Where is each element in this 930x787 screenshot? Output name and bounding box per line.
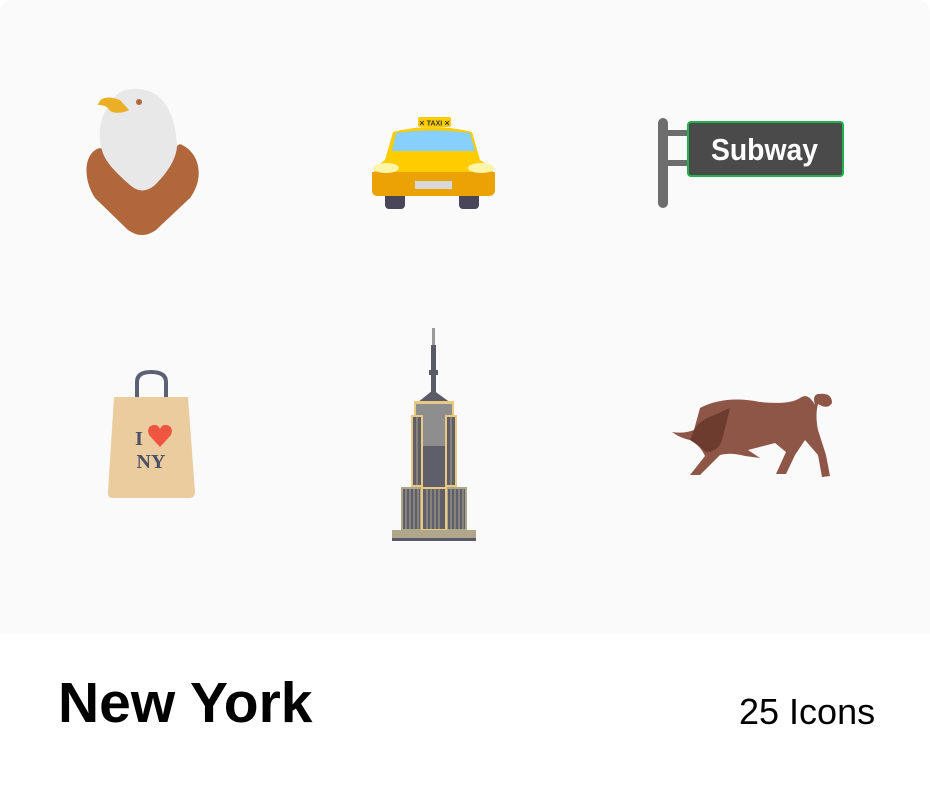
icon: eagle bbox=[86, 89, 199, 235]
title: New York bbox=[58, 671, 312, 735]
icon: empire state building bbox=[392, 328, 476, 541]
icon: I love NY bag bbox=[108, 372, 195, 498]
icon: bull bbox=[672, 394, 832, 477]
icon: subway sign: Subway bbox=[711, 132, 819, 167]
icon count: 25 Icons bbox=[739, 691, 875, 732]
icon: I love NY bag: NY bbox=[137, 451, 166, 473]
icon: taxi: ✕ TAXI ✕ bbox=[419, 120, 450, 128]
icon: taxi bbox=[372, 117, 495, 209]
icon: I love NY bag: I bbox=[135, 428, 143, 450]
icon: subway sign bbox=[658, 118, 843, 208]
